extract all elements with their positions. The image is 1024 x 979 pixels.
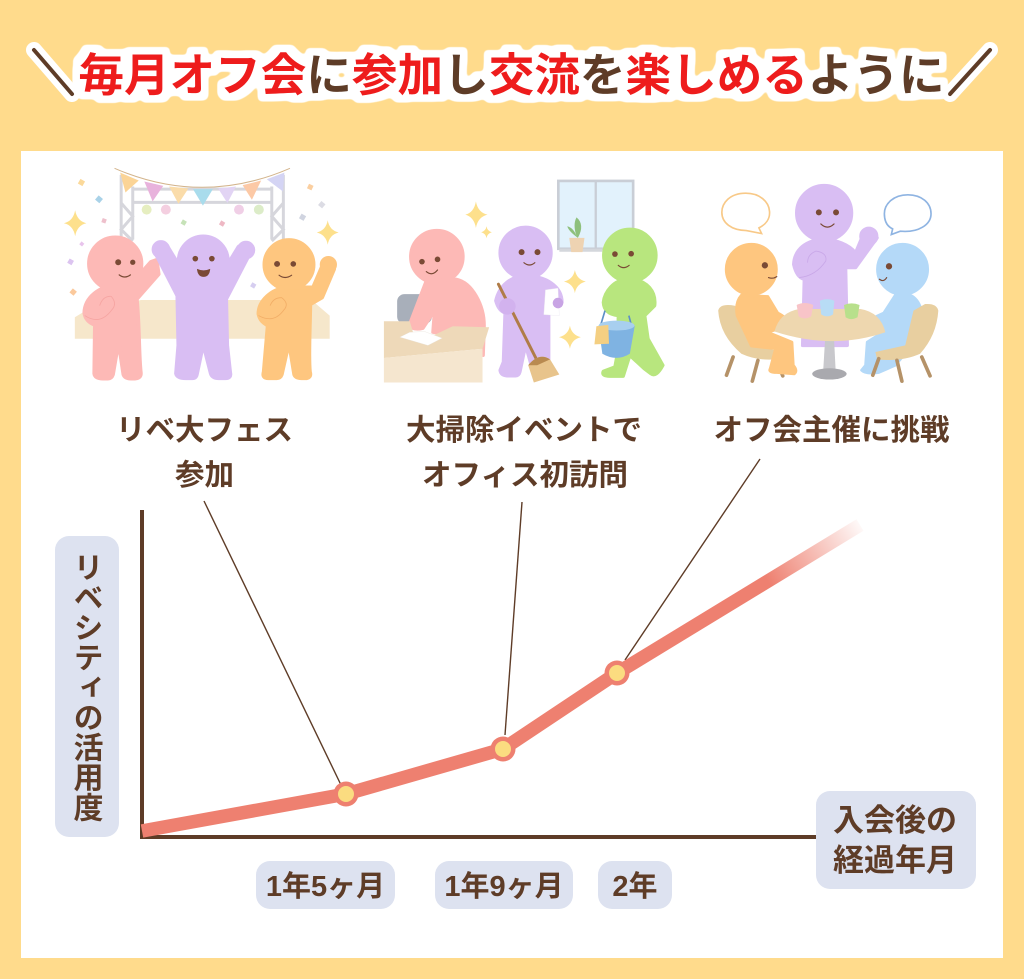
x-axis label: 経過年月 bbox=[833, 843, 957, 878]
table bbox=[823, 339, 836, 372]
growth curve bbox=[142, 673, 617, 831]
marker: 1年5ヶ月 bbox=[334, 782, 358, 806]
label: host meetup: オフ会主催に挑戦 bbox=[713, 414, 950, 447]
title right slash bbox=[950, 50, 990, 94]
label: cleaning event bbox=[406, 414, 642, 492]
tick label: 2年: 2年 bbox=[612, 870, 658, 903]
y-axis label: リベシティの活用度 bbox=[68, 552, 104, 822]
tick label: 1年9ヶ月 bbox=[435, 861, 573, 909]
main white panel bbox=[21, 151, 1003, 958]
x-axis label: 入会後の bbox=[833, 803, 957, 838]
title left slash bbox=[34, 50, 72, 94]
blue sitting character bbox=[862, 244, 928, 373]
label: cleaning event: オフィス初訪問 bbox=[422, 459, 628, 492]
title bbox=[34, 50, 990, 101]
marker: 1年9ヶ月 bbox=[490, 736, 516, 762]
chart: activity growth line bbox=[142, 459, 860, 837]
x-axis label bbox=[816, 791, 976, 889]
title text: 毎月オフ会に参加し交流を楽しめるように bbox=[78, 50, 945, 101]
purple character sweeping bbox=[496, 227, 562, 376]
chair right bbox=[875, 304, 938, 360]
tick label: 2年 bbox=[598, 861, 672, 909]
speech bubble left bbox=[722, 193, 770, 234]
purple standing character bbox=[794, 186, 877, 345]
orange sitting character bbox=[726, 244, 796, 374]
cups bbox=[797, 303, 813, 318]
axes bbox=[142, 510, 820, 837]
y-axis label bbox=[55, 536, 119, 837]
chair left bbox=[718, 305, 783, 360]
pink character wiping bbox=[409, 231, 484, 355]
illustration: cleaning event bbox=[384, 181, 663, 383]
tick label: 1年5ヶ月 bbox=[256, 861, 395, 909]
tick label: 1年9ヶ月: 1年9ヶ月 bbox=[444, 870, 564, 903]
pink character bbox=[84, 237, 159, 378]
green character with bucket bbox=[603, 229, 663, 376]
purple character bbox=[154, 236, 253, 378]
label: cleaning event: 大掃除イベントで bbox=[406, 414, 642, 447]
speech bubble right bbox=[884, 195, 931, 235]
illustration: meetup table bbox=[718, 186, 938, 381]
orange character bbox=[259, 240, 335, 378]
marker: 2年 bbox=[604, 660, 630, 686]
illustration: festival stage bbox=[64, 168, 339, 378]
leader lines bbox=[204, 459, 760, 785]
tick label: 1年5ヶ月: 1年5ヶ月 bbox=[266, 870, 385, 903]
label: festival: リベ大フェス bbox=[116, 414, 293, 447]
label: festival: 参加 bbox=[175, 459, 234, 492]
label: festival bbox=[116, 414, 293, 492]
